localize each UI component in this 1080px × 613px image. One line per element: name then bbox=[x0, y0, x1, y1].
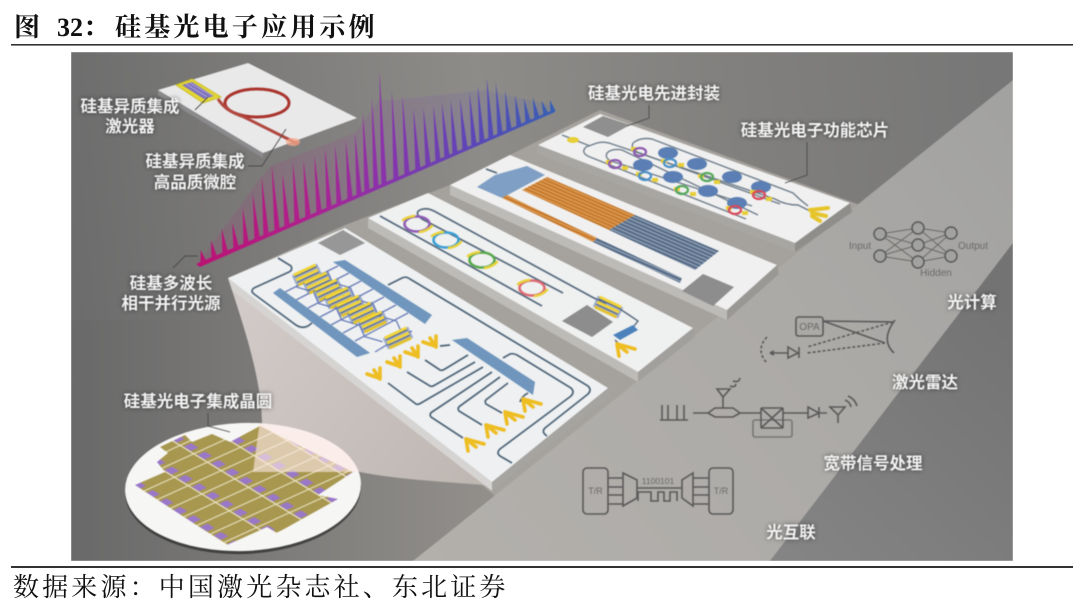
tan surface behind chips bbox=[228, 110, 860, 500]
orange strip bbox=[502, 195, 597, 242]
blue disks bbox=[633, 147, 771, 209]
neural network schematic: Hidden bbox=[920, 268, 952, 279]
title: 32： bbox=[57, 13, 109, 42]
neural network schematic bbox=[849, 222, 988, 279]
label: lidar: 激光雷达 bbox=[892, 373, 958, 392]
title: 硅基光电子应用示例 bbox=[115, 13, 378, 42]
coupler bbox=[617, 344, 635, 356]
panel: ring resonator chip bbox=[368, 193, 695, 382]
labels on image bbox=[80, 84, 997, 542]
panel: functional chip bbox=[538, 114, 852, 252]
leader lines bbox=[173, 97, 807, 432]
lower left shadow area bbox=[71, 320, 500, 561]
gray pad bbox=[562, 305, 613, 337]
blue fan coupler bbox=[477, 166, 545, 198]
blue waveguide block bbox=[609, 215, 719, 270]
blue bar right bbox=[452, 338, 535, 395]
label: optical computing: 光计算 bbox=[947, 292, 997, 312]
dark routing bbox=[252, 258, 590, 463]
routing to small block bbox=[615, 309, 638, 347]
blue ring bbox=[432, 232, 461, 248]
label: functional chip: 硅基光电子功能芯片 bbox=[741, 121, 889, 140]
broadband signal processing schematic bbox=[660, 378, 857, 437]
laser glow bbox=[286, 138, 300, 146]
label: multiwavelength source: 硅基多波长 bbox=[130, 275, 212, 293]
microcavity ring bbox=[225, 89, 289, 117]
label: heterogeneous laser: 硅基异质集成 bbox=[80, 98, 180, 116]
grating couplers upper bbox=[367, 336, 436, 379]
label: broadband signal: 宽带信号处理 bbox=[824, 453, 923, 473]
optical interconnect schematic bbox=[583, 468, 733, 514]
blue block bbox=[613, 325, 638, 340]
spectrum comb: coherent multi-wavelength source bbox=[196, 69, 556, 267]
coloured rings bbox=[403, 216, 547, 296]
light diagonal band bbox=[413, 80, 1013, 561]
source note: 数据来源：中国激光杂志社、东北证券 bbox=[13, 573, 509, 602]
label: optical interconnect: 光互联 bbox=[766, 523, 816, 542]
background floor bbox=[71, 52, 1013, 561]
blue bar lower bbox=[273, 288, 370, 357]
orange delay block bbox=[522, 177, 635, 230]
wafer bbox=[123, 419, 365, 558]
projection cone from wafer to chip bbox=[232, 289, 484, 486]
photonic mesh lines bbox=[285, 266, 412, 352]
modulator array bbox=[291, 263, 414, 350]
dark lower right corner bbox=[770, 243, 1013, 561]
routing waveguides bbox=[562, 135, 812, 219]
output coupler bbox=[810, 208, 828, 221]
label: wafer: 硅基光电子集成晶圆 bbox=[124, 391, 272, 411]
laser gain block bbox=[176, 79, 221, 103]
optical interconnect schematic: T/R bbox=[588, 486, 603, 496]
LiDAR schematic: OPA bbox=[799, 322, 820, 333]
optical interconnect schematic: T/R bbox=[714, 486, 729, 496]
gray pad bbox=[682, 274, 734, 306]
blue strip bbox=[593, 238, 682, 283]
output waveguide bbox=[218, 99, 298, 144]
packaging pad bbox=[583, 116, 630, 137]
LiDAR schematic bbox=[761, 317, 895, 363]
modulator bbox=[592, 295, 624, 319]
label: microcavity: 硅基异质集成 bbox=[146, 153, 244, 171]
optical interconnect schematic: 1100101 bbox=[642, 476, 674, 486]
neural network schematic: Input bbox=[849, 241, 871, 252]
blue bar upper bbox=[333, 260, 432, 324]
green ring bbox=[468, 252, 497, 268]
label: heterogeneous laser: 激光器 bbox=[105, 117, 155, 136]
main illustration bbox=[71, 52, 1013, 561]
yellow couplers bbox=[567, 137, 772, 215]
label: microcavity: 高品质微腔 bbox=[154, 172, 236, 192]
grating couplers lower bbox=[466, 399, 541, 451]
label: packaging: 硅基光电先进封装 bbox=[588, 84, 720, 103]
wafer dies bbox=[135, 426, 353, 545]
small ring resonators bbox=[609, 148, 765, 214]
panel: delay line chip bbox=[450, 155, 779, 320]
highlighted die region bbox=[253, 420, 365, 472]
title: 图 bbox=[14, 13, 40, 42]
label: multiwavelength source: 相干并行光源 bbox=[122, 293, 221, 313]
neural network schematic: Output bbox=[958, 241, 988, 252]
panel: front integrated chip bbox=[228, 228, 610, 491]
purple ring bbox=[403, 216, 432, 232]
bus waveguides bbox=[380, 209, 606, 306]
panel: heterogeneous laser chip bbox=[158, 63, 357, 158]
red ring bbox=[518, 280, 547, 296]
gray pad bbox=[318, 230, 365, 255]
